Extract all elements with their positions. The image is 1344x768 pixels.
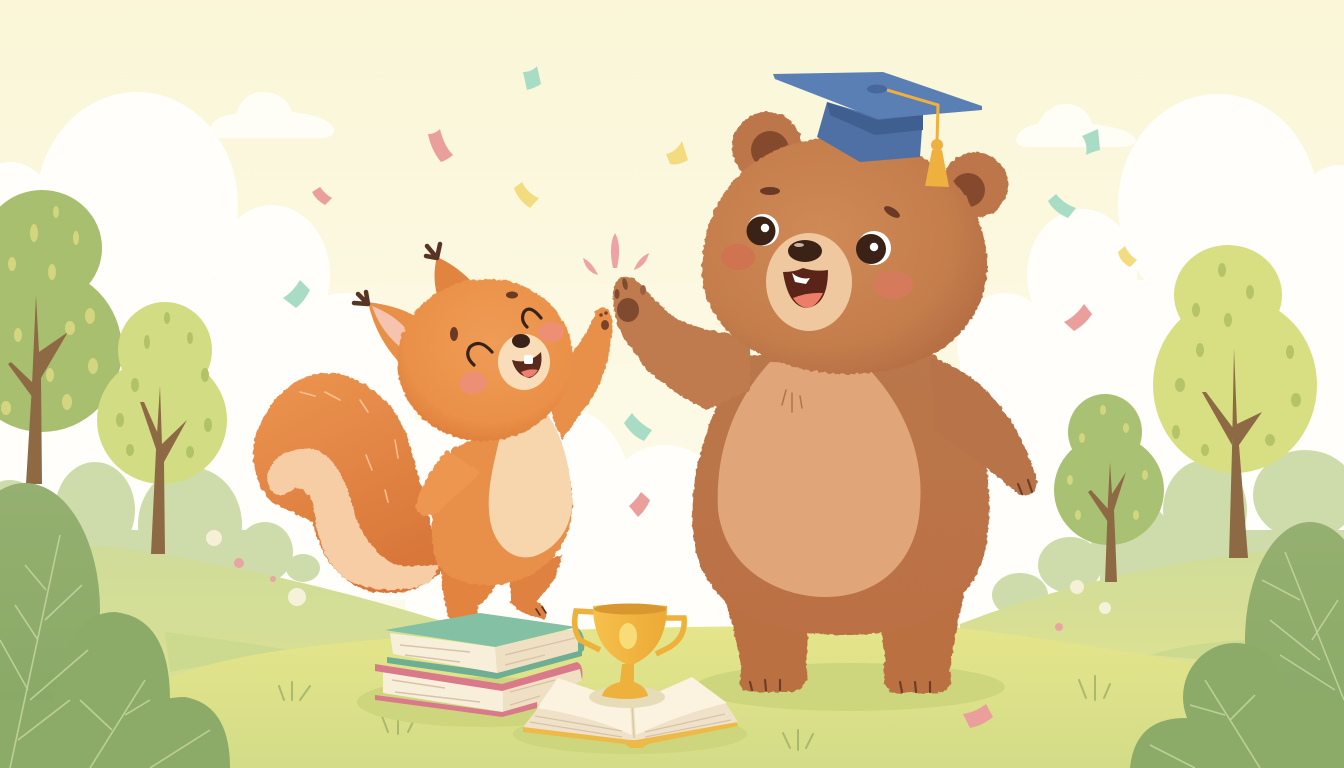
grass tufts: [279, 676, 1110, 750]
clouds: left cluster: [0, 92, 485, 620]
squirrel body: [432, 410, 572, 585]
squirrel head: [387, 268, 583, 452]
bear paw pads: [614, 278, 646, 322]
squirrel: [253, 244, 613, 632]
squirrel ears: [368, 257, 470, 360]
tree far left: [0, 190, 122, 484]
squirrel toes: [467, 607, 546, 628]
bear belly: [718, 362, 921, 597]
ground shadows: [357, 677, 607, 727]
bear legs: [722, 590, 965, 693]
bear head: [702, 138, 987, 374]
bear toes: [750, 680, 930, 692]
high-five sparks: [583, 233, 649, 275]
squirrel lower arm: [416, 450, 480, 515]
hill left: [0, 546, 470, 768]
distant bushes right: [992, 450, 1344, 617]
foreground leaves left: [0, 483, 230, 768]
open book: [523, 677, 738, 748]
bear chest tuft: [782, 390, 802, 412]
foreground leaves right: [1130, 522, 1344, 768]
distant bushes left: [0, 462, 320, 583]
bear right arm: [930, 358, 1037, 495]
squirrel tail: [253, 373, 442, 593]
confetti: [283, 66, 1137, 728]
clouds: right cluster: [957, 94, 1344, 630]
bear face: [721, 187, 913, 331]
squirrel legs: [440, 555, 562, 632]
small cloud left: [210, 92, 334, 138]
hill right: [960, 540, 1344, 700]
squirrel raised arm: [547, 307, 612, 440]
tree right large: [1153, 245, 1317, 558]
trophy: [575, 604, 684, 699]
tree right small: [1054, 394, 1164, 582]
upper book: [387, 650, 582, 679]
tree left second: [97, 302, 227, 554]
bear raised arm: [613, 277, 750, 410]
small cloud right: [1016, 104, 1136, 147]
bear: [613, 72, 1037, 693]
bear claws: [1018, 480, 1032, 494]
squirrel face: [450, 292, 564, 396]
bear inner ears: [751, 131, 789, 169]
squirrel belly: [489, 408, 572, 557]
graduation cap: [773, 72, 982, 187]
squirrel paw pad: [599, 311, 609, 330]
ground: [150, 626, 1344, 768]
books stack: [375, 613, 584, 717]
bear ears: [732, 112, 1008, 218]
squirrel ear tufts: [354, 244, 440, 304]
clouds: centre low: [440, 408, 740, 630]
bear body: [692, 355, 989, 635]
lower book: [383, 668, 582, 712]
pastel dots: [206, 530, 1111, 631]
